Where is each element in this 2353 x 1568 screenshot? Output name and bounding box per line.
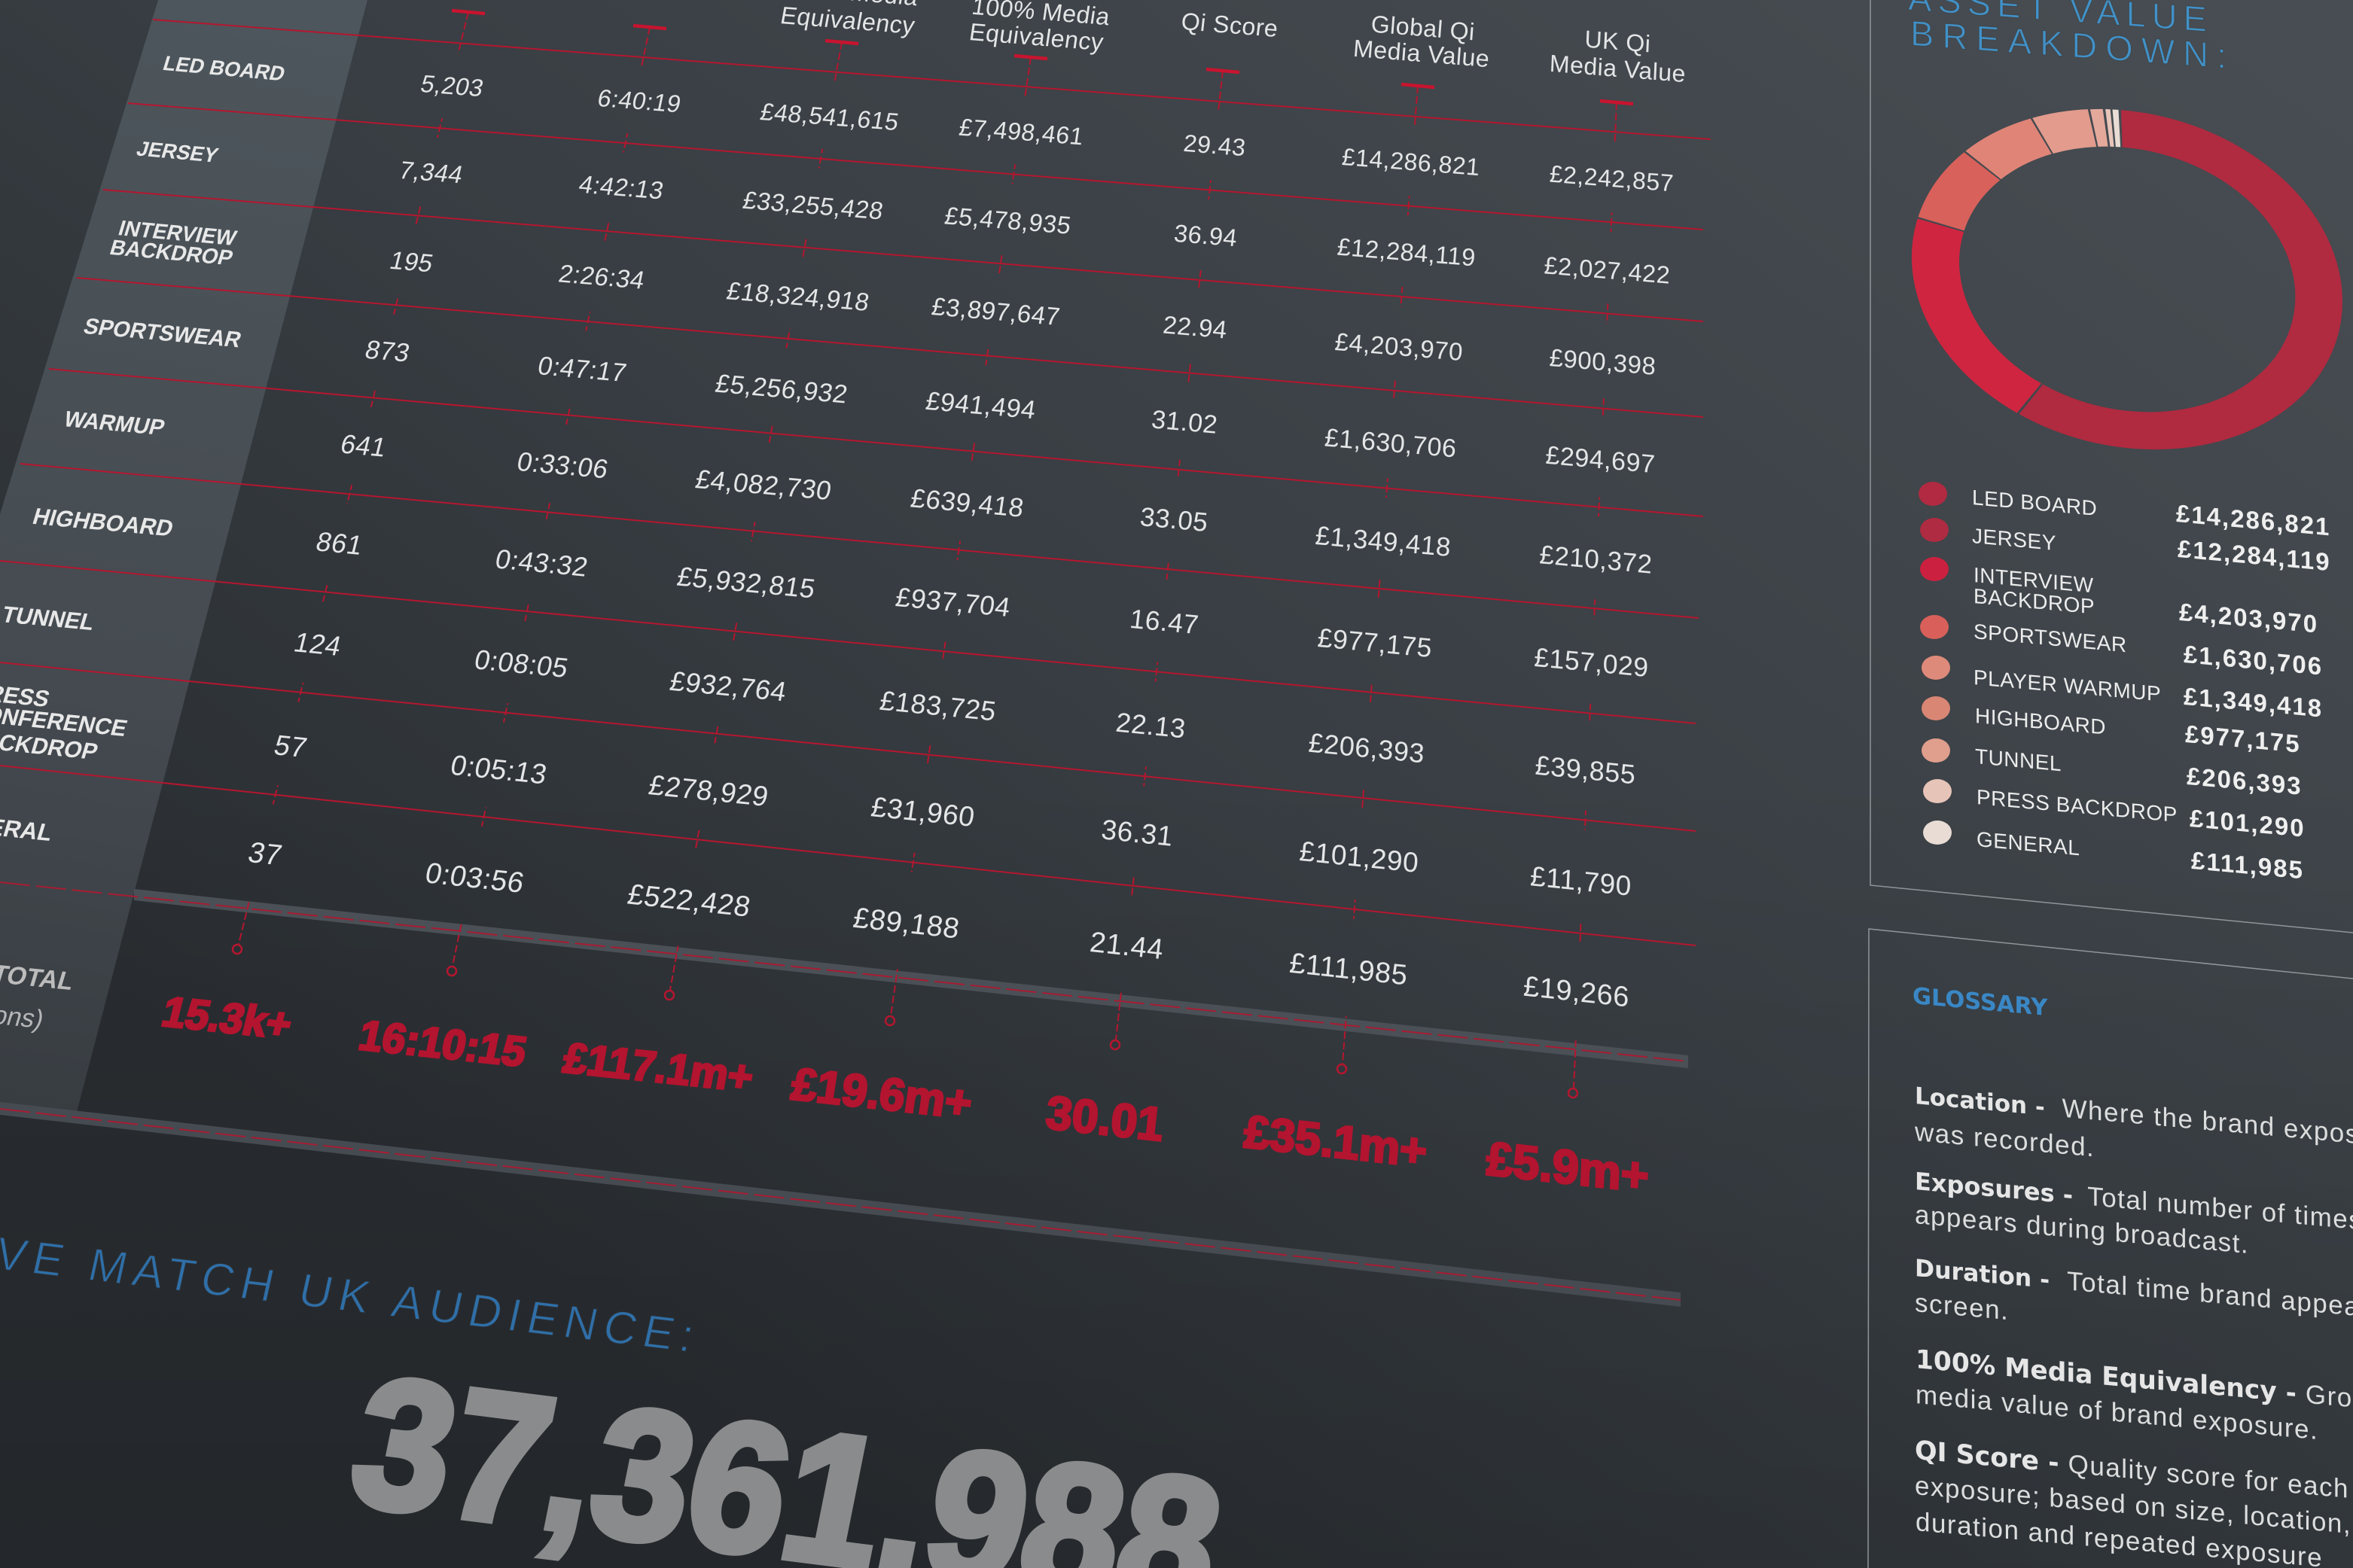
table data: tunnel row: £183,725 xyxy=(878,685,998,726)
row labels: JERSEY xyxy=(134,137,221,167)
table data: warmup row: £210,372 xyxy=(1539,540,1653,580)
table totals: 30.01 xyxy=(1044,1087,1166,1151)
table data: warmup row: £4,082,730 xyxy=(693,464,834,506)
glossary text: appears during broadcast. xyxy=(1915,1200,2249,1259)
legend labels: PRESS BACKDROP xyxy=(1977,785,2178,827)
table data: warmup row: £639,418 xyxy=(909,483,1026,523)
column headings: Equivalency xyxy=(968,18,1106,56)
table totals: 16:10:15 xyxy=(355,1012,530,1075)
legend values: £1,349,418 xyxy=(2184,683,2323,723)
segment: tunnel xyxy=(2105,109,2114,147)
table data: interview backdrop row: £4,203,970 xyxy=(1333,328,1464,367)
table data: press conference backdrop row: £31,960 xyxy=(869,790,977,833)
table data: tunnel row: 0:08:05 xyxy=(472,644,571,684)
segment: press and general xyxy=(2112,109,2120,148)
table data: warmup row: 0:33:06 xyxy=(514,446,611,484)
table totals: £5.9m+ xyxy=(1486,1132,1650,1203)
table data: LED board row: 6:40:19 xyxy=(595,84,684,117)
table data: press conference backdrop row: £278,929 xyxy=(646,769,771,812)
glossary text: was recorded. xyxy=(1914,1117,2095,1163)
column header bars xyxy=(452,11,1633,104)
row labels: BACKDROP xyxy=(107,236,236,270)
table data: interview backdrop row xyxy=(387,247,1657,381)
donut chart xyxy=(1905,93,2349,465)
table data: LED board row xyxy=(418,70,1675,196)
legend labels: INTERVIEW xyxy=(1974,563,2094,597)
glossary text: screen. xyxy=(1915,1288,2009,1326)
table data: LED board row: £2,242,857 xyxy=(1549,160,1675,196)
table data: jersey row: 36.94 xyxy=(1172,219,1239,251)
table data: tunnel row: 22.13 xyxy=(1114,707,1187,744)
segment: highboard xyxy=(2090,108,2108,148)
glossary text: QI Score - Quality score for each xyxy=(1915,1436,2349,1505)
table data: press conference backdrop row: £101,290 xyxy=(1298,835,1420,878)
column headings: Media Value xyxy=(1352,35,1491,72)
row labels: WARMUP xyxy=(61,407,168,440)
legend labels xyxy=(1972,486,2178,860)
table data: jersey row: 4:42:13 xyxy=(577,170,666,204)
table data: sportswear row: £5,256,932 xyxy=(713,370,850,410)
table data: jersey row: £33,255,428 xyxy=(741,186,885,224)
table data: highboard row: £157,029 xyxy=(1534,642,1649,683)
row labels: INTERVIEW xyxy=(115,217,240,251)
table data: highboard row: 16.47 xyxy=(1128,604,1200,640)
legend labels: BACKDROP xyxy=(1974,584,2095,618)
table data: tunnel row: £932,764 xyxy=(668,665,789,707)
table data: press conference backdrop row: 57 xyxy=(271,729,310,763)
legend labels: TUNNEL xyxy=(1975,744,2062,775)
legend markers xyxy=(1919,482,1952,845)
table data: interview backdrop row: £3,897,647 xyxy=(930,293,1062,331)
table data: general row: 37 xyxy=(245,836,285,872)
column headings xyxy=(778,0,1687,87)
legend values: £12,284,119 xyxy=(2178,535,2331,577)
table data: warmup row: £1,349,418 xyxy=(1314,521,1452,562)
legend values: £206,393 xyxy=(2187,763,2303,801)
panel: glossary frame xyxy=(1868,929,2353,1568)
table data: sportswear row: £294,697 xyxy=(1545,441,1656,479)
table data: press conference backdrop row: 36.31 xyxy=(1100,813,1175,852)
segment: LED board xyxy=(2006,101,2349,465)
legend labels: SPORTSWEAR xyxy=(1974,620,2127,656)
table data: sportswear row: 0:47:17 xyxy=(535,352,629,388)
legend values: £4,203,970 xyxy=(2179,598,2318,639)
legend labels: JERSEY xyxy=(1972,524,2056,555)
row labels: SPORTSWEAR xyxy=(81,314,244,352)
table totals: £19.6m+ xyxy=(788,1058,975,1128)
column headings: Media Value xyxy=(1549,50,1687,87)
table data: interview backdrop row: £18,324,918 xyxy=(724,277,872,317)
table data: highboard row xyxy=(313,526,1649,683)
table data: jersey row: 7,344 xyxy=(396,157,466,189)
legend labels: GENERAL xyxy=(1977,827,2080,860)
table data: highboard row: 0:43:32 xyxy=(492,543,591,583)
table data: press conference backdrop row xyxy=(271,729,1632,902)
table data: general row: £111,985 xyxy=(1288,947,1409,991)
table data: press conference backdrop row: 0:05:13 xyxy=(448,749,550,790)
table totals: £35.1m+ xyxy=(1242,1106,1429,1177)
table data: highboard row: £5,932,815 xyxy=(675,562,818,604)
glossary text: Exposures - Total number of times xyxy=(1915,1166,2353,1236)
table data: LED board row: £48,541,615 xyxy=(758,98,901,135)
table data: sportswear row xyxy=(362,336,1656,479)
column headings: Equivalency xyxy=(779,2,918,39)
legend labels: HIGHBOARD xyxy=(1975,704,2106,739)
table data: warmup row xyxy=(337,429,1653,580)
table data: interview backdrop row: £900,398 xyxy=(1549,344,1657,381)
divider band: below totals xyxy=(0,1102,1681,1307)
segment: interview backdrop xyxy=(1916,148,2002,233)
legend values: £1,630,706 xyxy=(2184,641,2323,681)
table data: press conference backdrop row: £11,790 xyxy=(1529,860,1632,902)
segment: sportswear xyxy=(1964,114,2053,183)
table data: interview backdrop row: 2:26:34 xyxy=(556,260,648,295)
table data: jersey row: £2,027,422 xyxy=(1544,251,1671,289)
legend values: £14,286,821 xyxy=(2176,500,2330,541)
total markers xyxy=(233,945,1577,1098)
table data: highboard row: £937,704 xyxy=(894,582,1013,623)
table data: general row xyxy=(245,836,1630,1014)
row labels xyxy=(0,51,288,1034)
table totals: £117.1m+ xyxy=(560,1034,757,1101)
table data: sportswear row: 31.02 xyxy=(1150,405,1219,440)
table totals: 15.3k+ xyxy=(157,988,297,1048)
table data: interview backdrop row: 195 xyxy=(387,247,436,278)
table data: LED board row: £7,498,461 xyxy=(957,114,1086,150)
column headings: Qi Score xyxy=(1180,8,1279,42)
table data: sportswear row: £941,494 xyxy=(924,387,1038,425)
legend values: £111,985 xyxy=(2191,847,2304,884)
legend values xyxy=(2176,500,2331,884)
column headings: Global Qi xyxy=(1370,11,1476,45)
table data: sportswear row: 873 xyxy=(362,336,413,367)
table data: tunnel row: 124 xyxy=(291,627,345,662)
panel: location column xyxy=(0,0,367,1112)
segment: player warmup xyxy=(2031,105,2097,157)
column headings: UK Qi xyxy=(1584,26,1651,57)
glossary title: GLOSSARY xyxy=(1913,983,2048,1021)
table data: jersey row: £12,284,119 xyxy=(1337,233,1477,271)
legend values: £977,175 xyxy=(2185,720,2301,759)
table data: highboard row: 861 xyxy=(313,526,366,561)
table data: sportswear row: £1,630,706 xyxy=(1324,423,1458,464)
table data: general row: £19,266 xyxy=(1522,970,1630,1014)
asset value title: BREAKDOWN: xyxy=(1910,13,2235,76)
row labels: HIGHBOARD xyxy=(29,503,177,541)
table totals xyxy=(157,988,1650,1203)
segment: jersey xyxy=(1910,218,2043,415)
row labels: LED BOARD xyxy=(160,51,288,85)
row labels: TUNNEL xyxy=(0,601,98,635)
table data: general row: 0:03:56 xyxy=(422,857,527,900)
table data: LED board row: 5,203 xyxy=(418,70,486,102)
legend values: £101,290 xyxy=(2190,805,2306,843)
table data: jersey row xyxy=(396,157,1671,289)
table rules xyxy=(0,20,1711,945)
divider band: above totals xyxy=(0,882,1688,1068)
table data: tunnel row: £39,855 xyxy=(1535,750,1636,790)
glossary text xyxy=(1914,1080,2353,1568)
panel: asset value frame xyxy=(1870,0,2353,933)
table data: warmup row: 33.05 xyxy=(1138,502,1209,537)
table data: tunnel row: £206,393 xyxy=(1307,727,1426,769)
legend labels: LED BOARD xyxy=(1972,486,2097,520)
table data: jersey row: £5,478,935 xyxy=(943,201,1073,239)
glossary text: exposure; based on size, location, xyxy=(1915,1471,2351,1539)
table data: tunnel row xyxy=(291,627,1636,790)
table data: general row: £89,188 xyxy=(851,902,962,945)
table data: LED board row: 29.43 xyxy=(1182,129,1247,161)
table data: general row: 21.44 xyxy=(1088,926,1166,966)
table data: warmup row: 641 xyxy=(337,429,390,463)
legend labels: PLAYER WARMUP xyxy=(1974,665,2161,705)
column tick marks xyxy=(239,12,1617,1088)
table data: interview backdrop row: 22.94 xyxy=(1162,312,1229,345)
table data: general row: £522,428 xyxy=(625,878,753,924)
table data: highboard row: £977,175 xyxy=(1316,623,1433,663)
glossary text: media value of brand exposure. xyxy=(1916,1380,2318,1445)
table data: LED board row: £14,286,821 xyxy=(1341,143,1481,181)
